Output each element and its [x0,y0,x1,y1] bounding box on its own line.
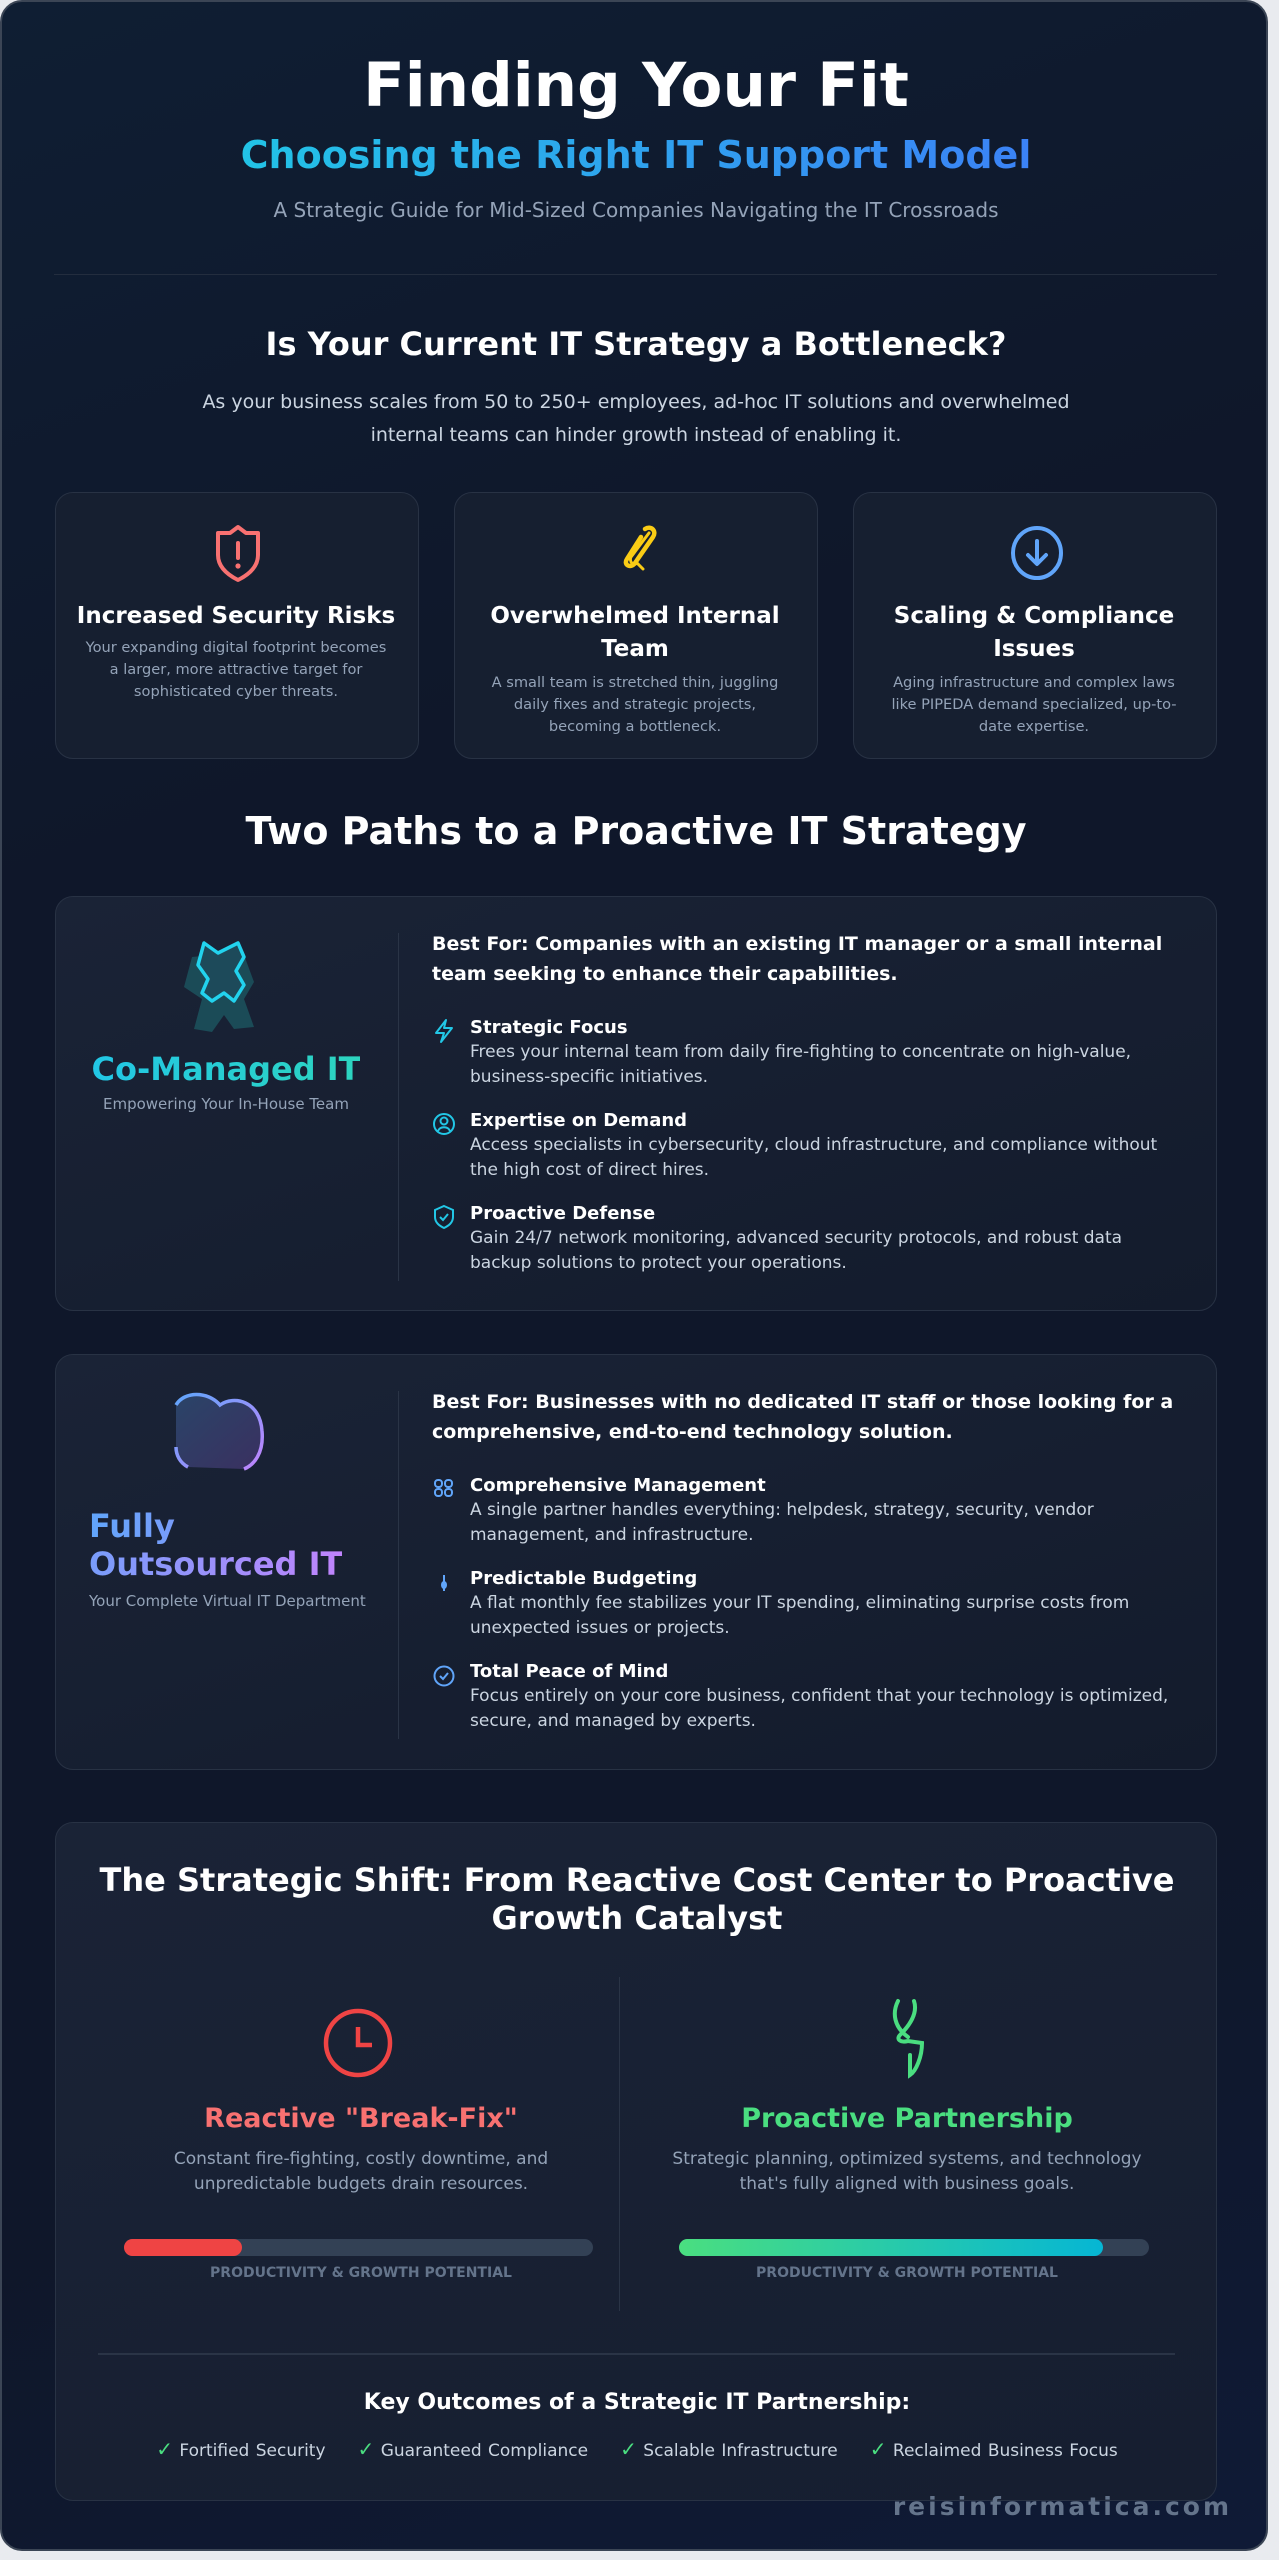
item: strategic focus: Frees your internal team from daily fire-fighting to concentrate on high-value, business-specific initiatives. [470,1042,1131,1087]
icon: growth [892,1998,924,2079]
card: scaling compliance [853,492,1217,759]
item: comprehensive management: A single partner handles everything: helpdesk, strategy, security, vendor management, and infrastructure. [470,1500,1094,1545]
subtitle: Empowering Your In-House Team [103,1095,349,1113]
subtitle: Your Complete Virtual IT Department [89,1592,366,1610]
footer: website: reisinformatica.com [893,2492,1232,2521]
title: Finding Your Fit [363,50,909,121]
item: peace of mind: Total Peace of Mind [470,1661,668,1682]
title: Reactive "Break-Fix" [204,2103,518,2134]
key outcomes heading: Key Outcomes of a Strategic IT Partnership: [364,2390,910,2415]
panel: co-managed IT [55,896,1217,1311]
title: fully outsourced [89,1507,342,1583]
icon: cloud [174,1392,264,1471]
desc: Constant fire-fighting, costly downtime, and unpredictable budgets drain resources. [174,2149,548,2194]
card: security risks [55,492,419,759]
item: predictable budgeting: A flat monthly fee stabilizes your IT spending, eliminating surprise costs from unexpected issues or projects. [470,1593,1129,1638]
title: fully outsourced: Outsourced IT [89,1545,342,1583]
text: Scaling & Compliance [894,603,1174,629]
heading: The Strategic Shift: From Reactive Cost Center to Proactive Growth Catalyst [100,1861,1174,1937]
title: Proactive Partnership [741,2103,1073,2134]
item: proactive defense [434,1203,1122,1273]
text: Issues [993,636,1075,662]
text: Team [601,636,669,662]
desc: Strategic planning, optimized systems, and technology that's fully aligned with business goals. [672,2149,1142,2194]
column: proactive [672,1998,1149,2281]
item: expertise: Access specialists in cybersecurity, cloud infrastructure, and compliance without the high cost of direct hires. [470,1135,1157,1180]
item: expertise: Expertise on Demand [470,1110,687,1131]
text [490,603,780,735]
tagline: A Strategic Guide for Mid-Sized Companies Navigating the IT Crossroads [273,198,999,222]
bar label: PRODUCTIVITY & GROWTH POTENTIAL [210,2265,512,2281]
text: Your expanding digital footprint becomes a larger, more attractive target for sophisticated cyber threats. [86,639,386,700]
item: comprehensive management [434,1475,1094,1545]
heading: two paths: Two Paths to a Proactive IT Strategy [245,809,1027,853]
item: predictable budgeting [441,1568,1129,1638]
heading: bottleneck: Is Your Current IT Strategy a Bottleneck? [266,325,1006,363]
text: Overwhelmed Internal [490,603,780,629]
item: comprehensive management: Comprehensive Management [470,1475,766,1496]
icon: arrow circle [1011,526,1063,580]
bar [124,2239,593,2256]
text: Increased Security Risks [77,603,395,629]
best for: Best For: Businesses with no dedicated IT staff or those looking for a comprehensive, end-to-end technology solution. [432,1391,1173,1443]
icon: clock [324,2008,392,2078]
item: expertise [433,1110,1157,1180]
text [891,603,1177,735]
text [77,603,395,700]
item: strategic focus [435,1017,1131,1087]
icon: shield alert [216,525,260,582]
text: Aging infrastructure and complex laws like PIPEDA demand specialized, up-to-date expertise. [891,674,1177,735]
panel: fully outsourced IT [55,1354,1217,1770]
bar label: PRODUCTIVITY & GROWTH POTENTIAL [756,2265,1058,2281]
item: proactive defense: Gain 24/7 network monitoring, advanced security protocols, and robust data backup solutions to protect your operations. [470,1228,1122,1273]
best for: Best For: Companies with an existing IT manager or a small internal team seeking to enhance their capabilities. [432,933,1162,985]
text: A small team is stretched thin, juggling daily fixes and strategic projects, becoming a bottleneck. [492,674,778,735]
column: reactive [124,2008,593,2281]
bar [679,2239,1149,2256]
title: co-managed: Co-Managed IT [92,1050,360,1088]
intro paragraph: As your business scales from 50 to 250+ employees, ad-hoc IT solutions and overwhelmed internal teams can hinder growth instead of enabling it. [202,391,1070,446]
item: peace of mind [434,1661,1168,1731]
subtitle: Choosing the Right IT Support Model [241,133,1031,177]
item: peace of mind: Focus entirely on your core business, confident that your technology is optimized, secure, and managed by experts. [470,1686,1168,1731]
title: fully outsourced: Fully [89,1507,175,1545]
item: proactive defense: Proactive Defense [470,1203,655,1224]
panel: strategic shift [55,1822,1217,2501]
card: overwhelmed team [454,492,818,759]
item: strategic focus: Strategic Focus [470,1017,628,1038]
icon: clip [624,526,657,571]
icon: puzzle shape [184,941,254,1032]
item: predictable budgeting: Predictable Budgeting [470,1568,697,1589]
outcomes list: ✓ Fortified Security ✓ Guaranteed Compliance ✓ Scalable Infrastructure ✓ Reclaimed Business Focus [156,2437,1118,2461]
